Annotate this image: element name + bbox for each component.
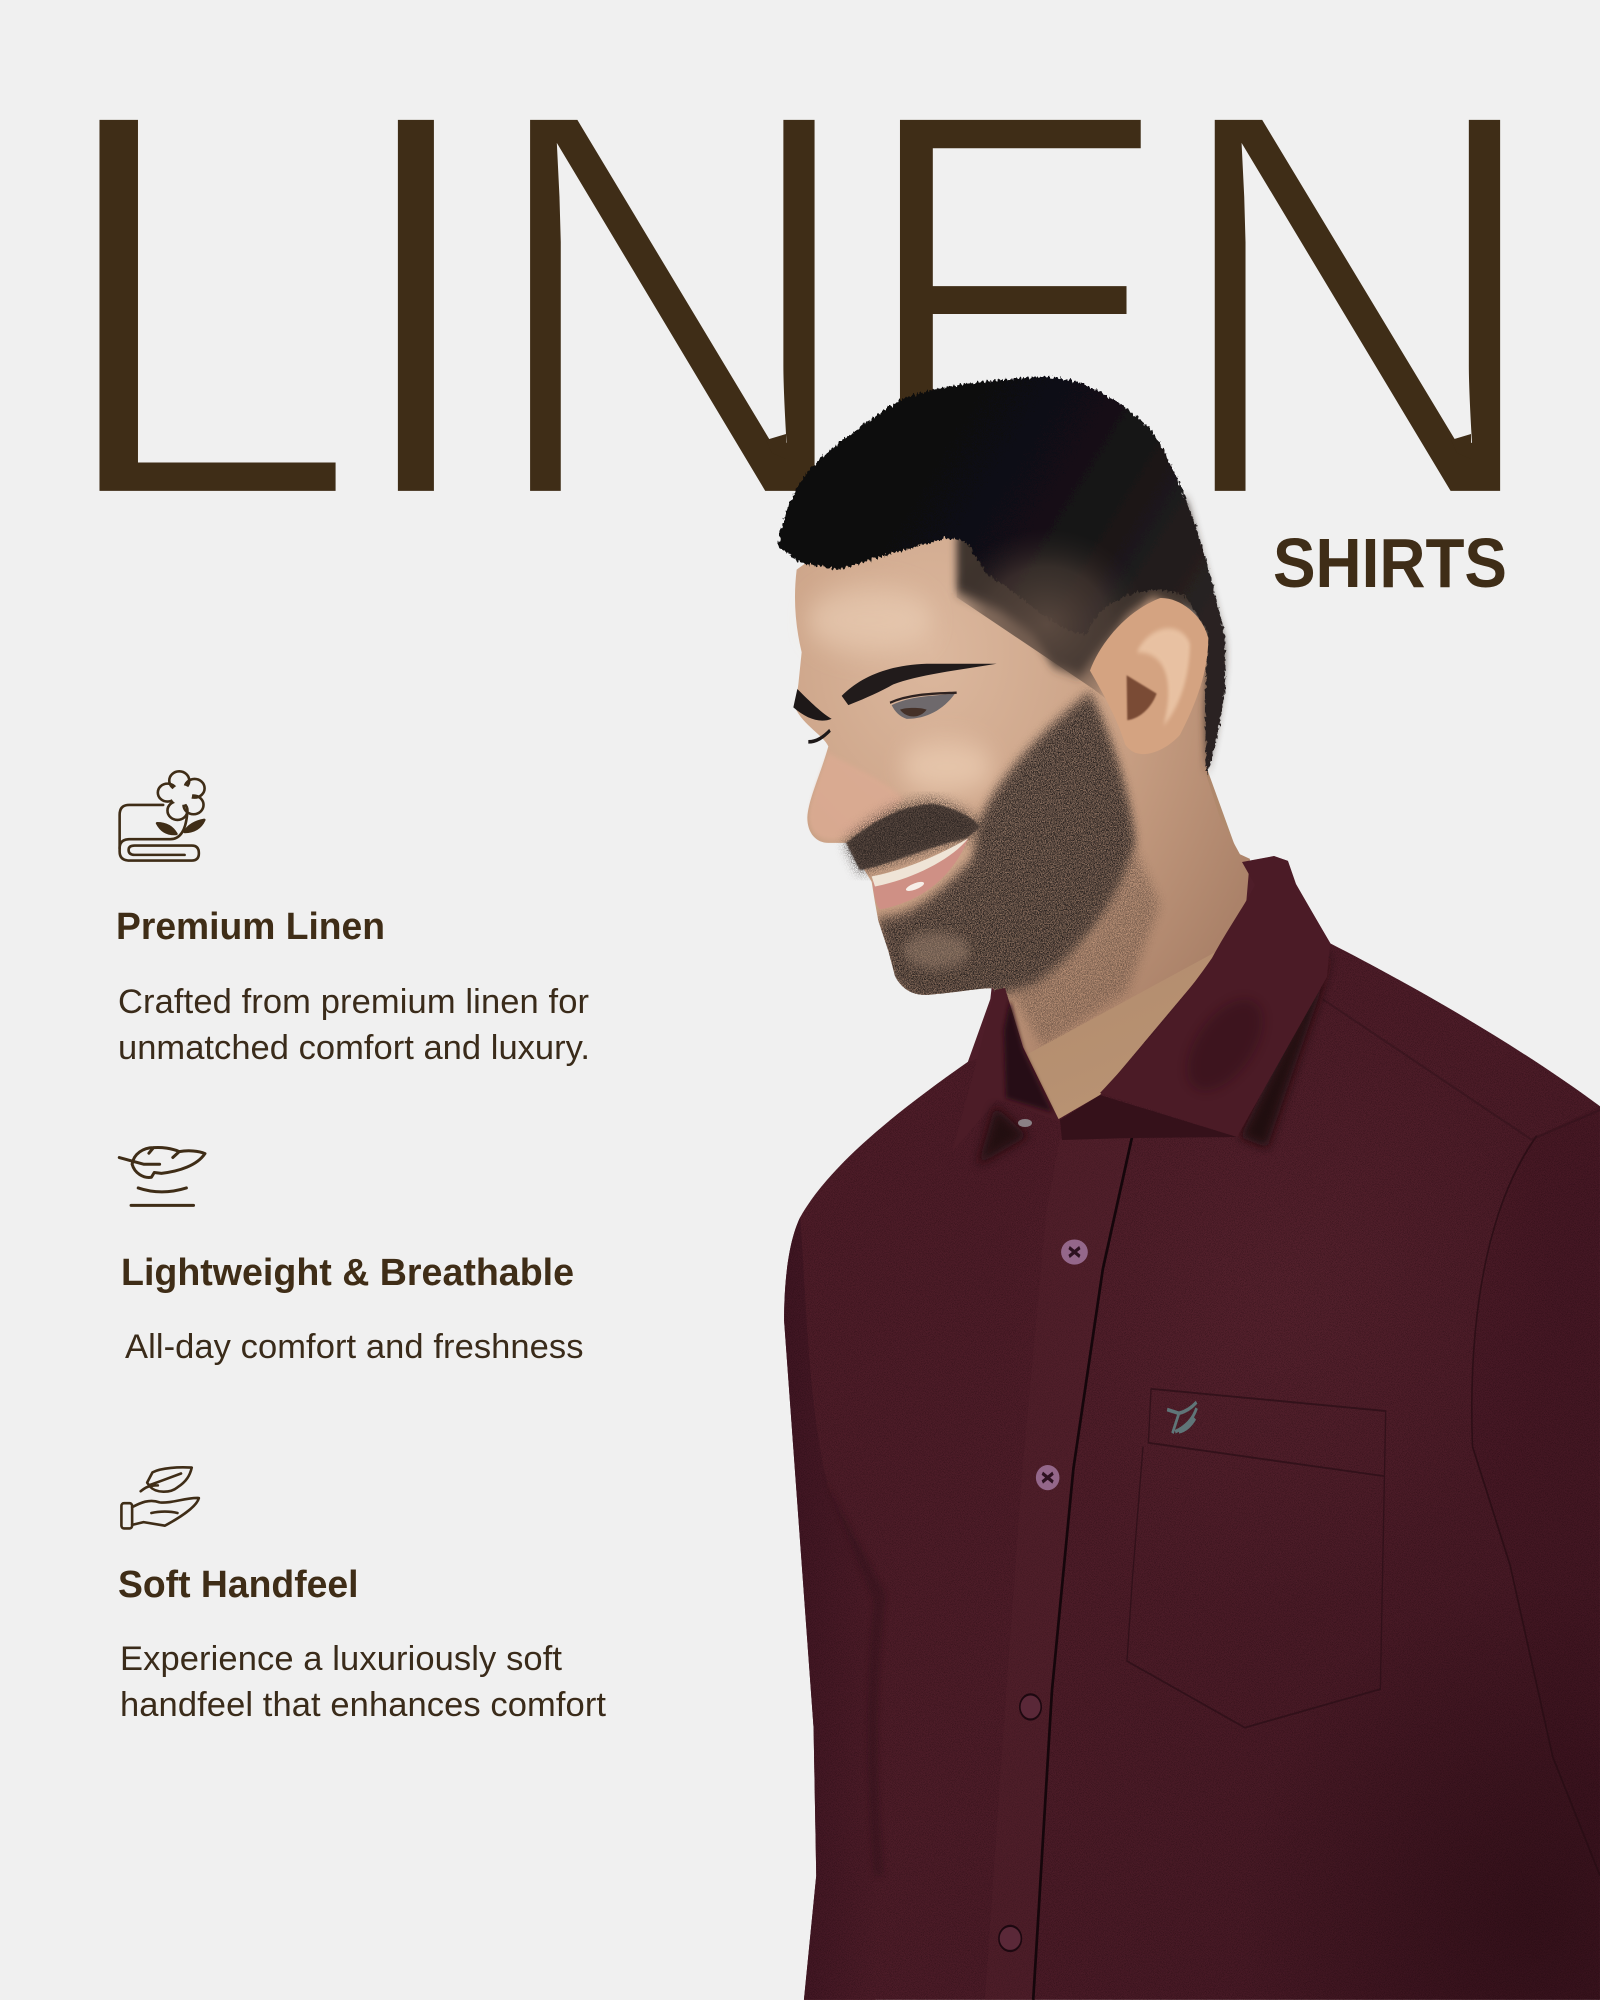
neck: [990, 766, 1240, 1120]
shadow under left collar: [978, 1106, 1028, 1165]
yoke seam: [1322, 999, 1600, 1140]
lower shadow: [1242, 1580, 1600, 2000]
icon: towel with flower: [120, 771, 205, 861]
rear fade base: [957, 478, 1224, 772]
beard clipped to face: [878, 694, 1160, 1047]
logo: embroidered bird: [1167, 1402, 1197, 1433]
fade overlay: [956, 544, 1142, 698]
shirt body: [784, 856, 1600, 2000]
moustache: [843, 799, 983, 873]
nose: [809, 753, 903, 840]
eye: [890, 693, 957, 719]
right sleeve: [1472, 1106, 1600, 1876]
arm seam: [1472, 1136, 1600, 1876]
heading: Lightweight & Breathable: [121, 1252, 574, 1294]
forehead highlight: [807, 588, 933, 652]
placket edge: [1033, 1136, 1132, 2000]
description: handfeel that enhances comfort: [120, 1686, 606, 1724]
photo: man in burgundy linen shirt: [778, 377, 1600, 2000]
beard base tone: [878, 694, 1135, 1001]
pocket: [1127, 1389, 1386, 1728]
beard stubble: [878, 694, 1135, 1001]
long brow: [842, 664, 997, 705]
feature: Lightweight and Breathable: [119, 1147, 584, 1366]
icon: hand with leaf: [121, 1467, 199, 1528]
description: Crafted from premium linen for: [118, 983, 589, 1021]
ear: [1090, 598, 1208, 754]
inner collar stand: [1004, 1000, 1052, 1112]
description: Experience a luxuriously soft: [120, 1640, 562, 1678]
far eye lashes: [808, 730, 830, 742]
face skin: [795, 478, 1250, 1060]
collar stand shadow: [1060, 1095, 1237, 1140]
title: LINEN: L: [46, 0, 362, 617]
feature: Soft Handfeel: [118, 1467, 606, 1724]
far brow: [793, 689, 832, 721]
torso: [784, 856, 1600, 2000]
buttons: [999, 1239, 1088, 1951]
feature: Premium Linen: [116, 771, 590, 1067]
sleeve shadow: [824, 1476, 886, 1876]
chin patch: [903, 932, 970, 969]
description: [118, 983, 590, 1067]
description: All-day comfort and freshness: [125, 1328, 584, 1366]
placket: [985, 1136, 1132, 2000]
icon: feather: [119, 1147, 205, 1205]
description: [120, 1640, 606, 1724]
right collar: [1100, 856, 1330, 1137]
heading: Soft Handfeel: [118, 1564, 358, 1606]
left sleeve: [784, 1217, 882, 2000]
title: LINEN: N: [480, 0, 865, 617]
chest highlight: [996, 988, 1553, 1609]
title: LINEN: I: [342, 0, 490, 617]
description: unmatched comfort and luxury.: [118, 1029, 590, 1067]
shadow under right collar: [1240, 948, 1332, 1148]
collar button: [1018, 1119, 1032, 1127]
neck stubble: [1013, 845, 1160, 1047]
collars: [952, 856, 1332, 1165]
title: LINEN: E: [854, 0, 1177, 618]
fabric texture: [784, 944, 1600, 2000]
collar crease shadow: [1172, 986, 1278, 1104]
head: [778, 377, 1250, 1060]
subtitle: SHIRTS: SHIRTS: [1273, 524, 1507, 602]
left collar: [952, 988, 1060, 1152]
cheek highlight: [900, 742, 993, 792]
title: LINEN: [46, 0, 1551, 618]
top hair: [778, 377, 1225, 776]
heading: Premium Linen: [116, 906, 385, 948]
mouth: [872, 838, 968, 909]
title: LINEN: N: [1164, 0, 1551, 618]
